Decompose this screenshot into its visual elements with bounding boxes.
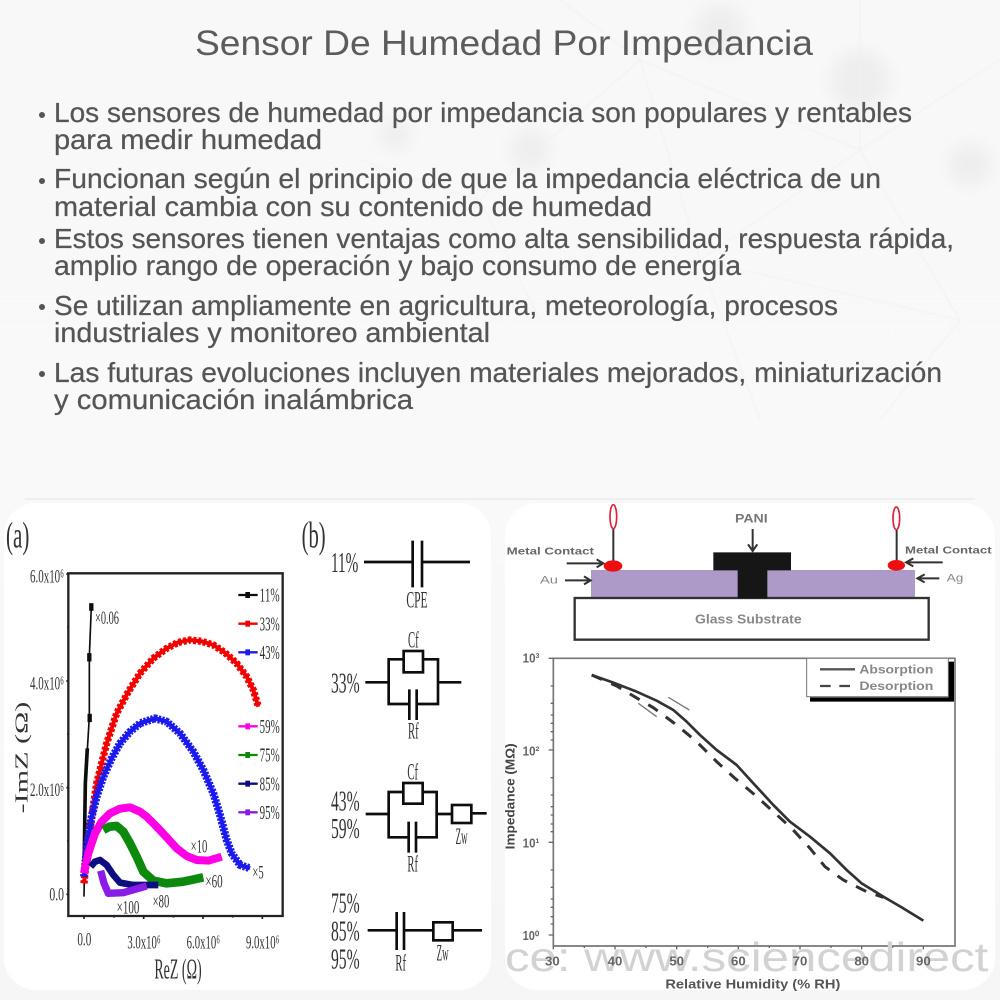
chart: impedance vs relative humidity: Relative Humidity (% RH) [665,978,840,992]
bullet 1: para medir humedad [54,124,322,155]
chart (a): Nyquist plot: ×80 [153,891,169,912]
diagram (b): equivalent circuits: Zw [456,824,468,850]
chart (a): Nyquist plot: 9.0x10⁶ [246,933,279,954]
chart (a): Nyquist plot: 75% [260,745,280,767]
bullet 1 [39,97,912,155]
bullet 2: Funcionan según el principio de que la impedancia eléctrica de un [54,163,881,194]
chart (a): Nyquist plot: ×5 [252,862,264,883]
direction arrows [638,697,689,717]
diagram (b): equivalent circuits: 43% [331,786,360,817]
chart (a): Nyquist plot: (a) [6,516,29,557]
chart: impedance vs relative humidity: 90 [916,954,931,968]
chart (a): Nyquist plot: ×60 [205,871,223,892]
chart (a): Nyquist plot: 0.0 [77,929,91,950]
chart (a): Nyquist plot: ×10 [191,837,207,858]
panel: impedance plots and circuits [4,503,491,990]
curve: desorption [592,675,883,897]
bullet 2 [39,163,881,222]
diagram (b): equivalent circuits: Rf [408,719,419,745]
diagram (b): equivalent circuits: Rf [407,852,418,878]
chart (a): Nyquist plot: 6.0x10⁶ [187,933,220,954]
chart (a): Nyquist plot: -ImZ (Ω) [11,702,32,813]
title: Sensor De Humedad Por Impedancia [195,24,814,63]
panel: sensor structure and humidity chart [505,503,995,990]
chart: impedance vs relative humidity: 30 [545,954,560,968]
diagram (b): equivalent circuits: Rf [395,951,406,977]
bullet 5 [39,357,942,415]
diagram (b): equivalent circuits: 59% [331,814,360,845]
diagram (b): equivalent circuits: 95% [331,944,360,975]
diagram (b): equivalent circuits: CPE [406,587,428,613]
chart (a): Nyquist plot: 11% [260,585,280,607]
diagram (b): equivalent circuits: 33% [331,669,360,700]
diagram: sensor cross-section: Metal Contact [905,546,993,557]
bullet 5: y comunicación inalámbrica [54,384,414,415]
diagram: sensor cross-section: Glass Substrate [695,612,802,626]
bullet 3 [39,223,954,281]
chart (a): Nyquist plot: 59% [260,716,280,738]
diagram (b): equivalent circuits [302,516,487,977]
watermark: ce: www.sciencedirect [505,934,988,980]
diagram (b): equivalent circuits: Zw [437,941,449,967]
chart: impedance vs relative humidity: 10² [523,744,539,758]
bullet 4 [39,290,838,348]
bullet 1: Los sensores de humedad por impedancia son populares y rentables [54,97,912,128]
chart (a): Nyquist plot: 85% [260,773,280,795]
bullet list [39,97,954,415]
chart: impedance vs relative humidity [503,652,988,992]
chart: impedance vs relative humidity: Impedance (MΩ) [503,743,518,849]
chart: impedance vs relative humidity: 40 [608,954,622,968]
diagram: sensor cross-section [507,505,993,640]
chart: impedance vs relative humidity: 70 [793,954,807,968]
chart: impedance vs relative humidity: 10³ [523,652,539,666]
legend [238,595,258,812]
bullet 2: material cambia con su contenido de humedad [54,191,652,222]
chart: impedance vs relative humidity: 10⁰ [523,929,540,943]
diagram (b): equivalent circuits: (b) [302,516,326,557]
bullet 3: Estos sensores tienen ventajas como alta sensibilidad, respuesta rápida, [54,223,954,254]
chart (a): Nyquist plot: ×100 [117,897,139,918]
bullet 3: amplio rango de operación y bajo consumo de energía [54,250,742,281]
bullet 4: industriales y monitoreo ambiental [54,317,490,348]
chart (a): Nyquist plot [6,516,283,985]
chart: impedance vs relative humidity: 80 [854,954,869,968]
chart: impedance vs relative humidity: 50 [669,954,684,968]
chart (a): Nyquist plot: ReZ (Ω) [154,954,202,985]
bullet 4: Se utilizan ampliamente en agricultura, meteorología, procesos [54,290,838,321]
legend box: Absorption [859,662,933,676]
chart (a): Nyquist plot: 43% [260,642,280,664]
chart (a): Nyquist plot: 4.0x10⁶ [30,673,64,694]
chart: impedance vs relative humidity: 60 [731,954,746,968]
chart (a): Nyquist plot: 0.0 [49,885,64,906]
diagram (b): equivalent circuits: Cf [408,627,419,653]
chart (a): Nyquist plot: 2.0x10⁶ [30,780,64,801]
curves [84,603,258,897]
chart (a): Nyquist plot: 3.0x10⁶ [127,933,161,954]
bullet 5: Las futuras evoluciones incluyen materiales mejorados, miniaturización [54,357,942,388]
legend box: Desorption [859,679,933,693]
diagram (b): equivalent circuits: 11% [331,548,358,579]
chart (a): Nyquist plot: 95% [260,802,280,824]
chart (a): Nyquist plot: 33% [260,613,280,635]
diagram: sensor cross-section: Ag [947,573,963,585]
diagram: sensor cross-section: Metal Contact [507,546,595,557]
chart: impedance vs relative humidity: 10¹ [523,836,539,850]
diagram: sensor cross-section: Au [540,575,558,587]
diagram (b): equivalent circuits: 85% [331,917,360,948]
legend box [807,658,954,702]
curve: absorption [592,675,923,921]
diagram (b): equivalent circuits: Cf [407,759,418,785]
diagram: sensor cross-section: PANI [735,511,768,525]
chart (a): Nyquist plot: ×0.06 [95,608,119,629]
chart (a): Nyquist plot: 6.0x10⁶ [30,567,64,588]
diagram (b): equivalent circuits: 75% [331,889,360,920]
